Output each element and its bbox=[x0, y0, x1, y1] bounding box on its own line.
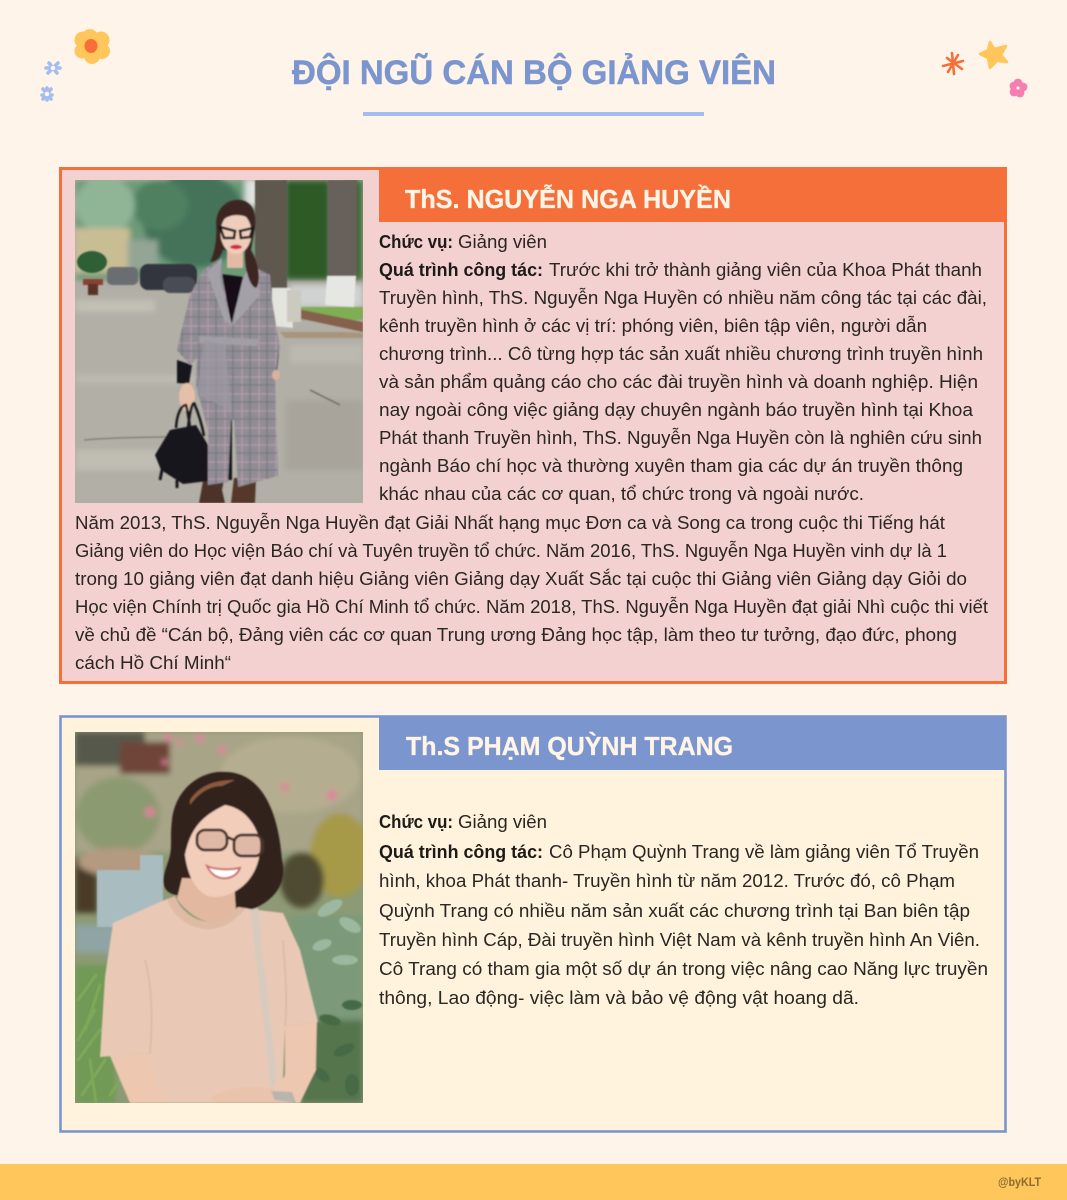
career text: Cô Trang có tham gia một số dự án trong việc nâng cao Năng lực truyền bbox=[379, 958, 988, 979]
career text beside photo: nay ngoài công việc giảng dạy chuyên ngành báo truyền hình tại Khoa bbox=[379, 399, 974, 420]
career text beside photo: kênh truyền hình ở các vị trí: phóng viên, biên tập viên, người dẫn bbox=[379, 315, 927, 336]
footer bar bbox=[0, 1164, 1067, 1200]
name banner: Th.S PHẠM QUỲNH TRANG bbox=[406, 731, 733, 761]
career text: Cô Phạm Quỳnh Trang về làm giảng viên Tổ Truyền bbox=[549, 841, 979, 862]
job title line: Chức vụ: bbox=[379, 231, 453, 252]
career text beside photo: khác nhau của các cơ quan, tổ chức trong và ngoài nước. bbox=[379, 483, 864, 504]
career text beside photo: chương trình... Cô từng hợp tác sản xuất nhiều chương trình truyền hình bbox=[379, 343, 983, 364]
hair back bbox=[163, 772, 283, 910]
career text beside photo: và sản phẩm quảng cáo cho các đài truyền hình và doanh nghiệp. Hiện bbox=[379, 371, 978, 392]
career text beside photo: Phát thanh Truyền hình, ThS. Nguyễn Nga Huyền còn là nghiên cứu sinh bbox=[379, 427, 982, 448]
icon: blue flower top bbox=[46, 63, 60, 73]
credit: @byKLT bbox=[998, 1177, 1041, 1189]
job title line bbox=[379, 231, 547, 252]
job title line: Chức vụ: bbox=[379, 811, 453, 832]
legs bbox=[198, 480, 226, 503]
career text beside photo: ngành Báo chí học và thường xuyên tham gia các dự án truyền thông bbox=[379, 455, 963, 476]
awards text: Giảng viên do Học viện Báo chí và Tuyên truyền tổ chức. Năm 2016, ThS. Nguyễn Nga Huyền vinh dự là 1 bbox=[75, 540, 947, 561]
icon: blue flower bottom bbox=[42, 88, 52, 100]
leaves right bbox=[311, 896, 363, 965]
lips bbox=[230, 245, 242, 249]
awards text: trong 10 giảng viên đạt danh hiệu Giảng viên Giảng dạy Xuất Sắc tại cuộc thi Giảng viên Giảng dạy Giỏi do bbox=[75, 568, 967, 589]
career text: Quá trình công tác: bbox=[379, 841, 543, 862]
shirt shading bbox=[145, 940, 286, 1053]
black undersleeves and top bbox=[177, 360, 192, 384]
shirt bbox=[100, 899, 318, 1103]
hair back and ponytail bbox=[210, 200, 259, 288]
face bbox=[184, 800, 260, 897]
bag strap bbox=[250, 908, 277, 1090]
plaid coat bbox=[177, 258, 280, 487]
career text beside photo: Trước khi trở thành giảng viên của Khoa Phát thanh bbox=[549, 259, 982, 280]
panel background bbox=[60, 168, 1006, 682]
arms bbox=[110, 1052, 152, 1103]
title underline bbox=[363, 112, 704, 116]
career text beside photo bbox=[379, 259, 987, 504]
bag bbox=[176, 403, 204, 436]
watch bbox=[271, 1091, 296, 1103]
icon: orange asterisk bbox=[943, 53, 963, 74]
job title line: Giảng viên bbox=[458, 231, 547, 252]
icon: yellow flower bbox=[74, 29, 110, 64]
career text: hình, khoa Phát thanh- Truyền hình từ năm 2012. Trước đó, cô Phạm bbox=[379, 870, 955, 891]
neck bbox=[177, 878, 236, 923]
awards text bbox=[75, 512, 989, 673]
icon: yellow star bbox=[980, 42, 1007, 68]
career text: thông, Lao động- việc làm và bảo vệ động vật hoang dã. bbox=[379, 987, 859, 1008]
photo: smiling woman with glasses bbox=[75, 732, 370, 1103]
leaves left bbox=[77, 974, 120, 1103]
career text beside photo: Quá trình công tác: bbox=[379, 259, 543, 280]
awards text: về chủ đề “Cán bộ, Đảng viên các cơ quan Trung ương Đảng học tập, làm theo tư tưởng, đạo đức, phong bbox=[75, 624, 957, 645]
photo: woman in plaid coat bbox=[75, 172, 363, 503]
job title line: Giảng viên bbox=[458, 811, 547, 832]
career text: Quỳnh Trang có nhiều năm sản xuất các chương trình tại Ban biên tập bbox=[379, 900, 970, 921]
awards text: Năm 2013, ThS. Nguyễn Nga Huyền đạt Giải Nhất hạng mục Đơn ca và Song ca trong cuộc thi Tiếng hát bbox=[75, 512, 946, 533]
panel: Nguyễn Nga Huyền bbox=[60, 168, 1006, 682]
glasses bbox=[220, 227, 253, 238]
panel background bbox=[60, 716, 1006, 1132]
name banner bbox=[379, 716, 1006, 770]
glasses bbox=[197, 830, 263, 856]
career text bbox=[379, 841, 988, 1008]
neck and face bbox=[227, 250, 243, 268]
career text beside photo: Truyền hình, ThS. Nguyễn Nga Huyền có nhiều năm công tác tại các đài, bbox=[379, 287, 987, 308]
name banner bbox=[379, 168, 1006, 222]
panel: Phạm Quỳnh Trang bbox=[60, 716, 1006, 1132]
awards text: cách Hồ Chí Minh“ bbox=[75, 652, 231, 673]
smile bbox=[207, 866, 240, 878]
title: ĐỘI NGŨ CÁN BỘ GIẢNG VIÊN bbox=[292, 53, 776, 92]
icon: pink flower bbox=[1010, 79, 1027, 97]
name banner: ThS. NGUYỄN NGA HUYỀN bbox=[405, 184, 731, 214]
job title line bbox=[379, 811, 547, 832]
awards text: Học viện Chính trị Quốc gia Hồ Chí Minh tổ chức. Năm 2018, ThS. Nguyễn Nga Huyền đạt giải Nhì cuộc thi viết bbox=[75, 596, 989, 617]
hand bbox=[179, 383, 195, 411]
career text: Truyền hình Cáp, Đài truyền hình Việt Nam và kênh truyền hình An Viên. bbox=[379, 929, 980, 950]
